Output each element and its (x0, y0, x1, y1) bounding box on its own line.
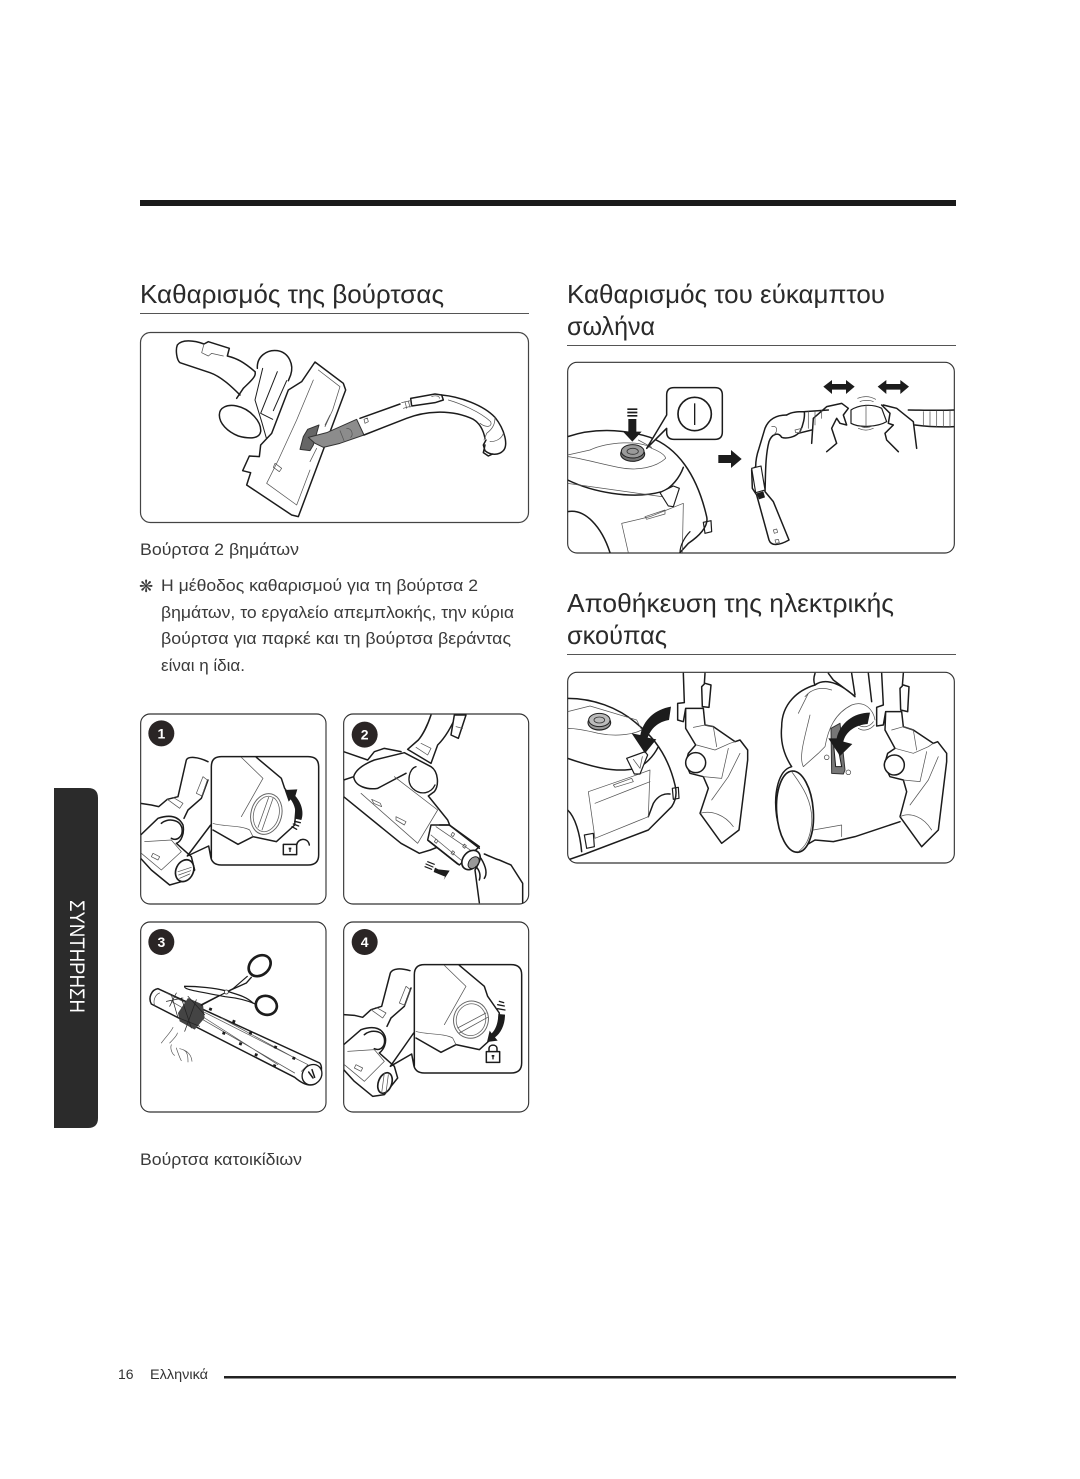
arrow: next step (718, 450, 742, 468)
step badge 2: 2 (361, 727, 369, 743)
icon: crevice nozzle inserted in the brush (300, 425, 319, 451)
footer: page number and language: Ελληνικά (150, 1366, 208, 1382)
text block: brush note: Βούρτσα 2 βημάτων (140, 540, 299, 559)
icon: press down arrow (623, 408, 642, 442)
icon: rotate arrow (285, 789, 302, 820)
icon: pull arrow (434, 868, 450, 880)
text block: brush note: βούρτσα για παρκέ και τη βούρτσα βεράντας (161, 629, 511, 648)
step badge 1: 1 (157, 725, 165, 741)
heading: vacuum storage (567, 588, 956, 655)
icon: rotate arrow (487, 1014, 505, 1042)
icon: upright brush left (678, 673, 748, 843)
panel: brush and hose illustration (140, 332, 528, 522)
heading: flexible hose cleaning (567, 279, 956, 346)
arrow: storage hook left (632, 707, 671, 753)
panel: storage illustration (568, 672, 954, 863)
step badge 2 (352, 722, 378, 748)
text block: pet brush: Βούρτσα κατοικίδιων (140, 1150, 302, 1169)
icon: roller (150, 989, 326, 1089)
text block: brush note: ❋ (139, 577, 153, 597)
callout: power symbol (647, 388, 722, 448)
panel: step 2 (344, 714, 529, 904)
text block: brush note: βημάτων, το εργαλείο απεμπλοκής, την κύρια (161, 603, 514, 622)
icon: vacuum body with power button (568, 430, 712, 553)
heading: vacuum storage: σκούπας (567, 620, 667, 650)
heading: brush cleaning: Καθαρισμός της βούρτσας (140, 279, 444, 309)
icon: hose wand and curved handle (360, 404, 485, 438)
footer: page number and language: 16 (118, 1366, 134, 1382)
icon: closed padlock (486, 1045, 500, 1062)
panel: step 3 (141, 922, 326, 1112)
callout: brush end cap, unlock (187, 757, 319, 865)
icon: open padlock (283, 839, 309, 855)
arrow: double-headed right (878, 380, 909, 394)
icon: upright brush right (877, 673, 947, 847)
panel: hose cleaning illustration (568, 362, 954, 553)
icon: vacuum front view (568, 698, 679, 860)
step badge 4 (352, 929, 378, 955)
icon: brush overview (344, 969, 411, 1096)
panel: step 1 (141, 714, 326, 904)
text block: brush note: Η μέθοδος καθαρισμού για τη βούρτσα 2 (161, 576, 478, 595)
arrow: double-headed left (823, 380, 855, 394)
icon: scissors (185, 951, 280, 1018)
sidebar tab: maintenance: ΣΥΝΤΗΡΗΣΗ (65, 900, 88, 1013)
callout: brush end cap, lock (390, 965, 522, 1073)
icon: hair tangled on roller (161, 993, 205, 1062)
sidebar tab: maintenance (54, 788, 98, 1128)
step badge 1 (148, 720, 174, 746)
step badge 4: 4 (361, 934, 369, 950)
step badge 3 (148, 929, 174, 955)
footer: page number and language (118, 1366, 956, 1382)
top rule (140, 200, 956, 206)
heading: flexible hose cleaning: σωλήνα (567, 311, 655, 341)
step badge 3: 3 (157, 934, 165, 950)
icon: pulling hand (475, 854, 523, 903)
icon: brush overview (141, 757, 208, 885)
icon: hands squeezing hose (808, 397, 954, 452)
heading: flexible hose cleaning: Καθαρισμός του εύκαμπτου (567, 279, 885, 309)
icon: brush with pulled-out roller (344, 715, 523, 903)
text block: brush note: είναι η ίδια. (161, 656, 245, 675)
heading: vacuum storage: Αποθήκευση της ηλεκτρικής (567, 588, 894, 618)
icon: vacuum rear view (774, 673, 900, 854)
icon: tube of the brush (176, 341, 255, 395)
panel: step 4 (344, 922, 529, 1112)
arrow: storage hook right (828, 713, 870, 756)
text block: brush note (139, 540, 514, 675)
icon: hose handle (752, 410, 828, 544)
